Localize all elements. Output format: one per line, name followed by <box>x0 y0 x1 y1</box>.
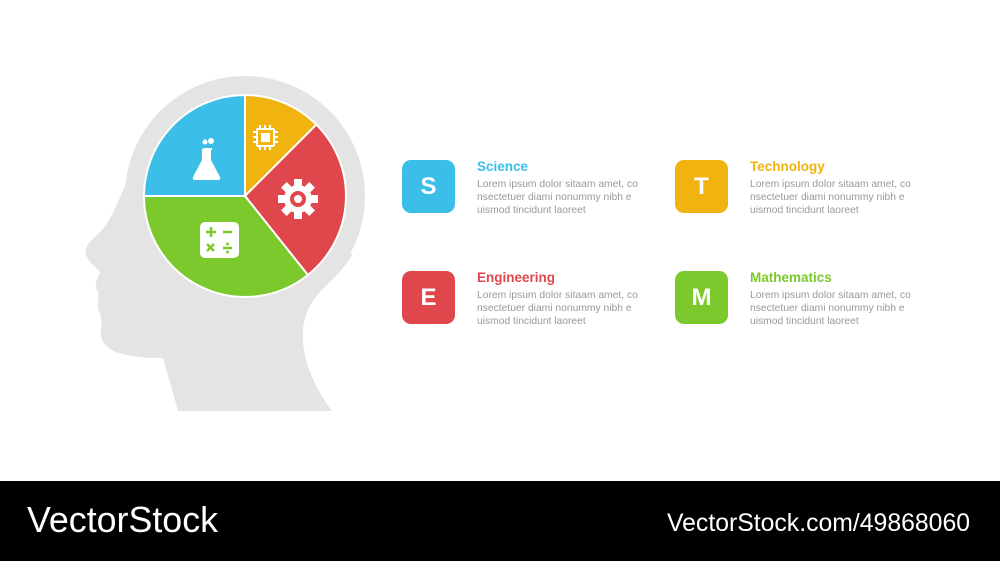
card: Mathematics: M <box>692 284 712 311</box>
pie chart <box>144 95 346 297</box>
card: Science: Lorem ipsum dolor sitaam amet, co nsectetuer diami nonummy nibh e uismod tincidunt laoreet <box>477 179 638 216</box>
card: Engineering <box>402 270 638 327</box>
footer bar <box>0 481 1000 561</box>
card: Engineering: E <box>420 284 436 311</box>
card: Mathematics: Lorem ipsum dolor sitaam amet, co nsectetuer diami nonummy nibh e uismod tincidunt laoreet <box>750 290 911 327</box>
icon: gear <box>278 179 318 219</box>
card: Science: Science <box>477 159 528 174</box>
footer bar: VectorStock <box>27 499 219 540</box>
card: Technology <box>675 159 911 216</box>
head silhouette <box>86 76 365 411</box>
card: Science <box>402 159 638 216</box>
card: Engineering: Lorem ipsum dolor sitaam amet, co nsectetuer diami nonummy nibh e uismod tincidunt laoreet <box>477 290 638 327</box>
card: Engineering: Engineering <box>477 270 555 285</box>
card: Technology: T <box>694 173 709 200</box>
card: Mathematics: Mathematics <box>750 270 832 285</box>
card: Mathematics <box>675 270 911 327</box>
card: Technology: Lorem ipsum dolor sitaam amet, co nsectetuer diami nonummy nibh e uismod tincidunt laoreet <box>750 179 911 216</box>
icon: chip <box>253 125 278 150</box>
icon: flask <box>193 138 220 180</box>
footer bar: VectorStock.com/49868060 <box>667 509 970 537</box>
icon: calculator <box>200 222 239 258</box>
card: Science: S <box>420 173 436 200</box>
card: Technology: Technology <box>750 159 825 174</box>
